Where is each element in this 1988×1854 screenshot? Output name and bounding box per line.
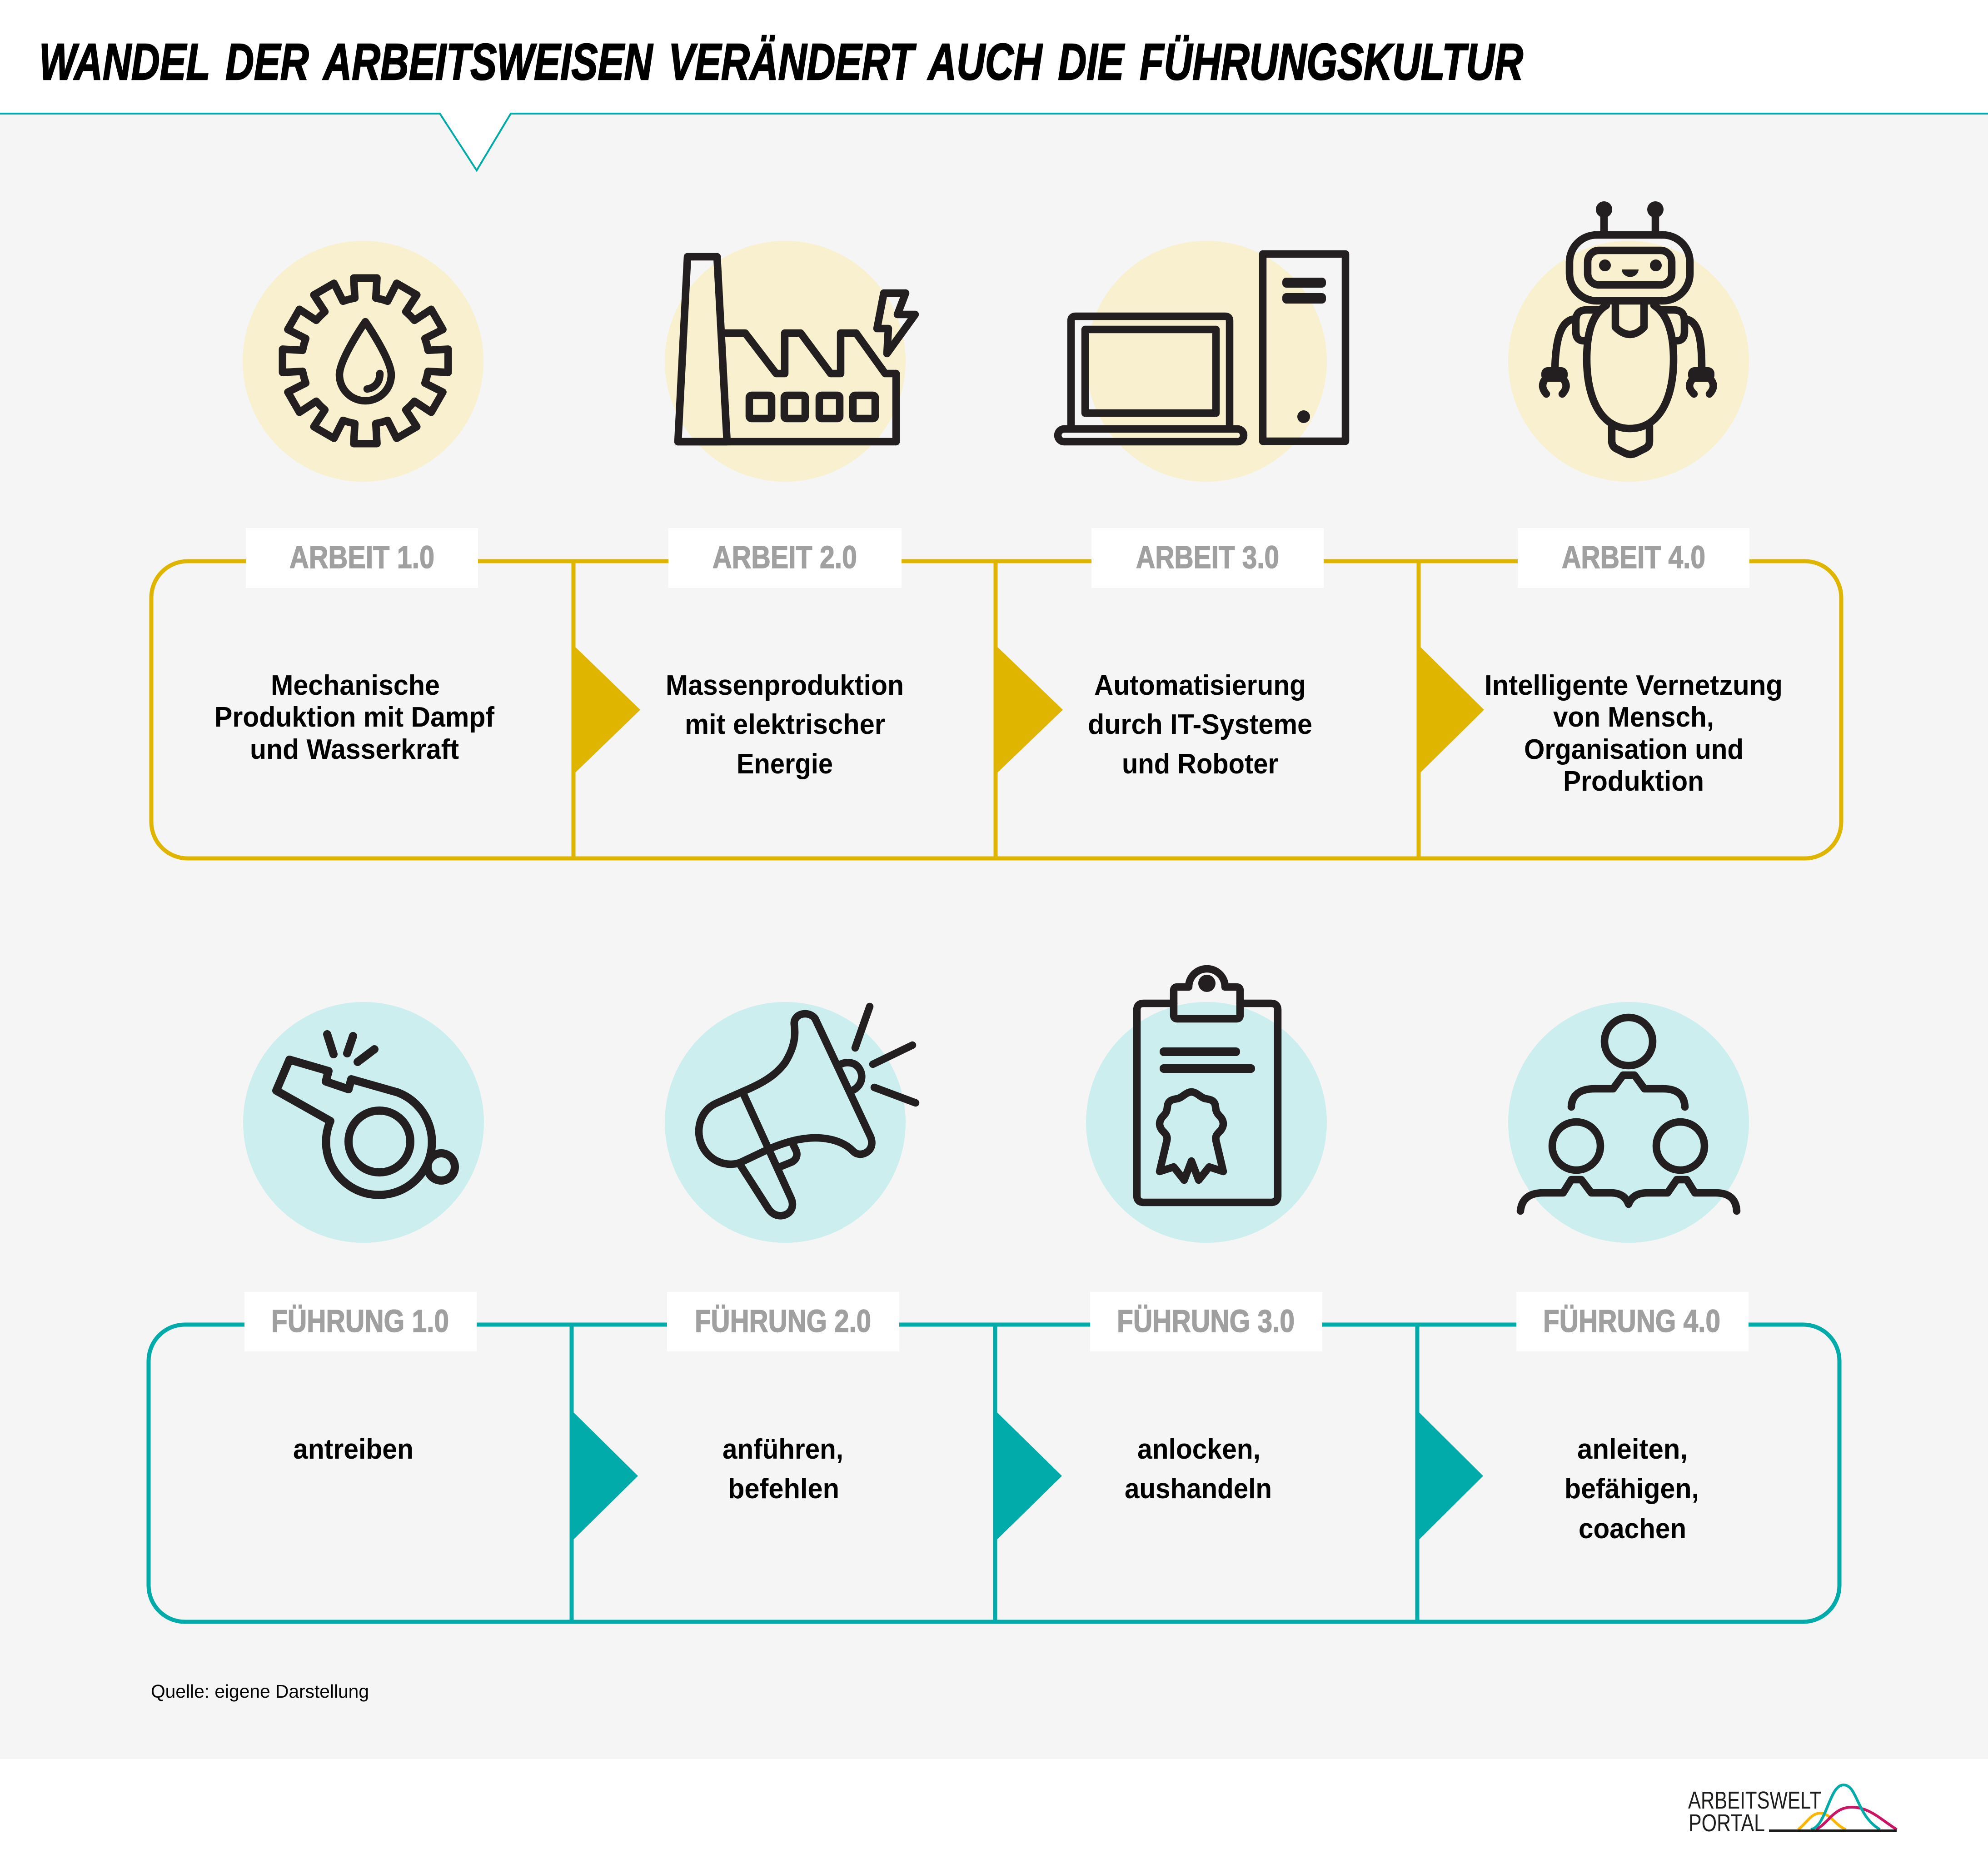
label: Führung 1.0 [244,1292,477,1351]
icon: factory with lightning bolt on yellow circle [665,241,915,482]
label: Führung 2.0: FÜHRUNG 2.0 [695,1303,871,1339]
footer band [0,1759,1988,1854]
icon: robot on yellow circle [1508,201,1749,482]
logo: Arbeitswelt Portal: PORTAL [1689,1809,1765,1837]
label: Führung 3.0: FÜHRUNG 3.0 [1117,1303,1295,1339]
text: Arbeit 2.0 description: Massenproduktion [666,670,904,701]
logo: Arbeitswelt Portal: ARBEITSWELT [1688,1787,1821,1814]
text: Führung 4.0 description [1564,1434,1699,1545]
label: Arbeit 1.0: ARBEIT 1.0 [289,539,434,575]
text: Führung 4.0 description: coachen [1579,1513,1686,1545]
label: Führung 4.0: FÜHRUNG 4.0 [1543,1303,1720,1339]
arrow 3 [1417,643,1484,776]
label: Arbeit 3.0 [1091,528,1324,588]
text: Arbeit 2.0 description: Energie [737,748,833,780]
text: Führung 3.0 description: anlocken, [1137,1434,1261,1465]
icon: gear with drop on yellow circle [243,241,483,482]
text: Arbeit 3.0 description [1088,670,1312,780]
title: WANDEL DER ARBEITSWEISEN VERÄNDERT AUCH DIE FÜHRUNGSKULTUR [39,33,1523,90]
panel: Arbeit timeline [151,528,1841,858]
header band [0,0,1988,171]
text: Arbeit 3.0 description: durch IT-Systeme [1088,709,1312,740]
text: Arbeit 1.0 description: Mechanische [271,670,440,701]
arrow 3 [1415,1409,1483,1543]
label: Führung 1.0: FÜHRUNG 1.0 [271,1303,449,1339]
label: Arbeit 2.0 [668,528,902,588]
label: Arbeit 4.0 [1518,528,1749,588]
text: Führung 2.0 description [722,1434,843,1505]
text: Arbeit 4.0 description: Intelligente Vernetzung [1485,670,1783,701]
panel: Führung timeline [149,1292,1839,1622]
text: Arbeit 4.0 description: von Mensch, [1553,702,1714,733]
arrow 2 [993,1409,1062,1543]
text: Arbeit 2.0 description: mit elektrischer [685,709,885,740]
text: Führung 1.0 description: antreiben [293,1434,414,1465]
text: Arbeit 1.0 description [214,670,494,765]
text: Führung 3.0 description [1125,1434,1272,1505]
text: Führung 2.0 description: befehlen [728,1473,839,1505]
label: Führung 4.0 [1516,1292,1749,1351]
label: Arbeit 3.0: ARBEIT 3.0 [1136,539,1279,575]
source note: Quelle: eigene Darstellung [151,1681,369,1702]
icon: laptop and computer tower on yellow circle [1058,241,1345,482]
arrow 2 [994,643,1063,776]
label: Führung 2.0 [667,1292,899,1351]
icon: whistle on teal circle [243,1002,484,1243]
text: Arbeit 1.0 description: Produktion mit Dampf [214,702,494,733]
icon: megaphone on teal circle [665,1002,916,1243]
arrow 1 [572,643,640,776]
text: Führung 4.0 description: befähigen, [1564,1473,1699,1505]
text: Arbeit 4.0 description: Produktion [1563,766,1704,797]
label: Arbeit 4.0: ARBEIT 4.0 [1562,539,1705,575]
text: Arbeit 3.0 description: Automatisierung [1094,670,1306,701]
text: Arbeit 4.0 description [1485,670,1783,797]
text: Führung 2.0 description: anführen, [722,1434,843,1465]
text: Arbeit 3.0 description: und Roboter [1122,748,1278,780]
text: Arbeit 1.0 description: und Wasserkraft [250,734,459,765]
icon: clipboard with certificate seal on teal circle [1086,969,1327,1243]
icon: three connected people on teal circle [1508,1002,1749,1243]
label: Führung 3.0 [1090,1292,1322,1351]
text: Führung 3.0 description: aushandeln [1125,1473,1272,1505]
label: Arbeit 2.0: ARBEIT 2.0 [712,539,857,575]
text: Arbeit 4.0 description: Organisation und [1524,734,1744,765]
arrow 1 [570,1409,638,1543]
text: Führung 4.0 description: anleiten, [1577,1434,1688,1465]
text: Arbeit 2.0 description [666,670,904,780]
logo: Arbeitswelt Portal [1688,1785,1897,1837]
label: Arbeit 1.0 [246,528,478,588]
